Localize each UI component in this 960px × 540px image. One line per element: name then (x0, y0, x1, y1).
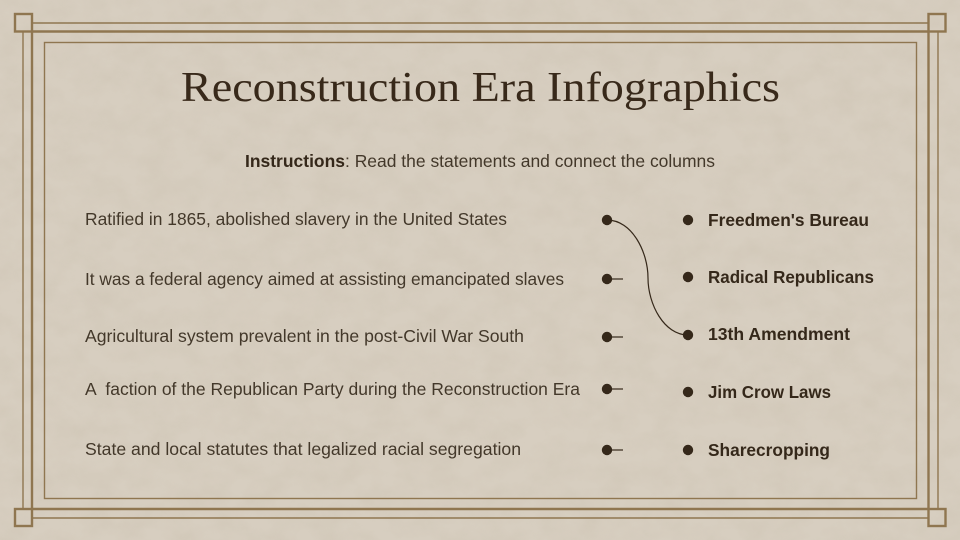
right column: terms: Freedmen's Bureau (708, 210, 869, 230)
right column: terms: 13th Amendment (708, 324, 850, 344)
right column: terms: Jim Crow Laws (708, 382, 831, 402)
left column: statements (85, 209, 580, 459)
right column: terms: Sharecropping (708, 440, 830, 460)
connector curve: 13th Amendment (607, 220, 688, 335)
left column: statements: Ratified in 1865, abolished slavery in the United States (85, 209, 507, 229)
right column: terms: Radical Republicans (708, 267, 874, 287)
left column: statements: State and local statutes that legalized racial segregation (85, 439, 521, 459)
left column: statements: It was a federal agency aimed at assisting emancipated slaves (85, 269, 564, 289)
left column: statements: Agricultural system prevalent in the post-Civil War South (85, 326, 524, 346)
title: Reconstruction Era Infographics (181, 65, 780, 111)
connector stubs (607, 279, 623, 450)
instructions: Instructions: Read the statements and connect the columns (245, 151, 715, 171)
right column: terms (708, 210, 874, 460)
connector dots: left column (602, 215, 612, 455)
left column: statements: A faction of the Republican Party during the Reconstruction Era (85, 379, 580, 399)
connector dots: right column (683, 215, 693, 455)
